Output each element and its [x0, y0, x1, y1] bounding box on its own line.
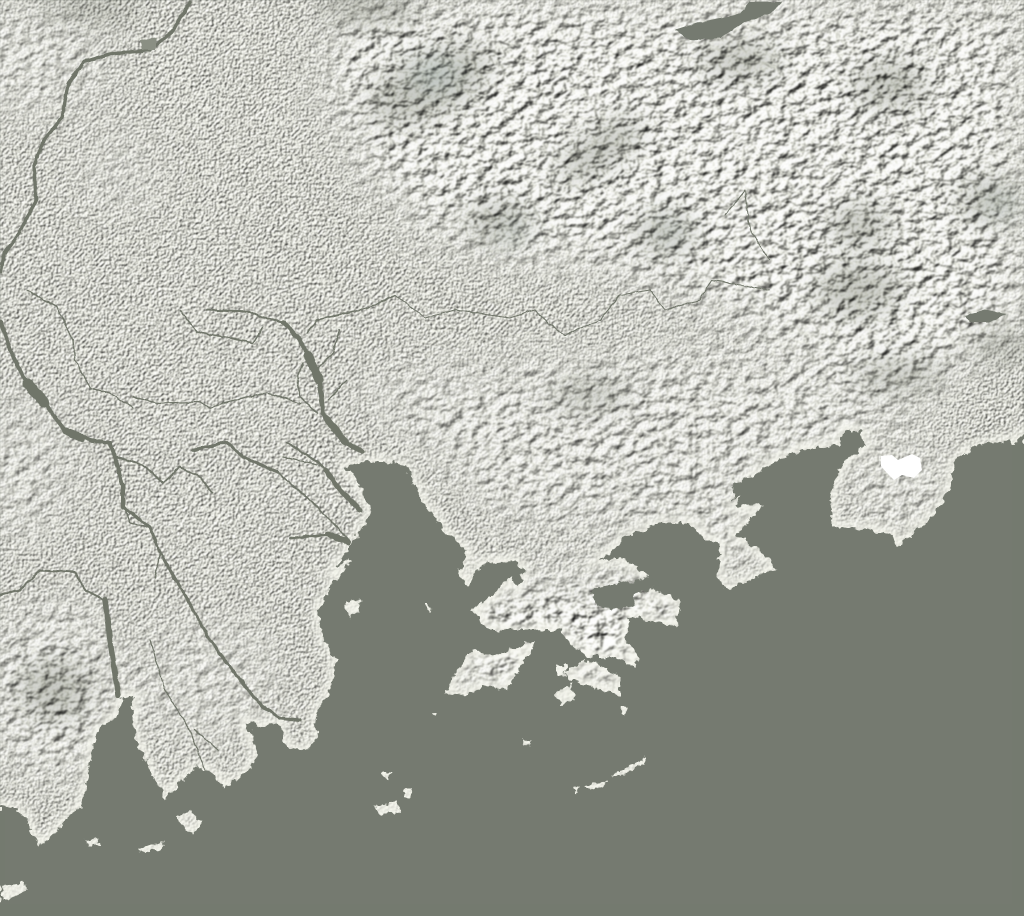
small headwater pond	[140, 38, 156, 50]
river: south-west inlet	[1, 570, 105, 600]
river: east estuary	[207, 310, 283, 322]
coast: bright shoreline glow	[0, 430, 1024, 916]
river: delta channel	[123, 507, 300, 720]
lake: eastern reservoir	[965, 310, 1006, 322]
river: northern reach	[1, 2, 190, 272]
lake: northern reservoir	[675, 2, 782, 40]
mountain tone patches	[20, 0, 1024, 720]
mountain snow-blue tint patches	[413, 63, 1012, 240]
white patch: urban area	[881, 454, 922, 480]
river: eastern tributary	[395, 190, 770, 335]
river: delta distributaries	[27, 290, 300, 408]
sea: frame edge bands	[0, 445, 1024, 916]
river: west main channel	[1, 322, 123, 507]
sea and islands	[0, 430, 1024, 916]
inner harbour bays	[590, 576, 660, 610]
